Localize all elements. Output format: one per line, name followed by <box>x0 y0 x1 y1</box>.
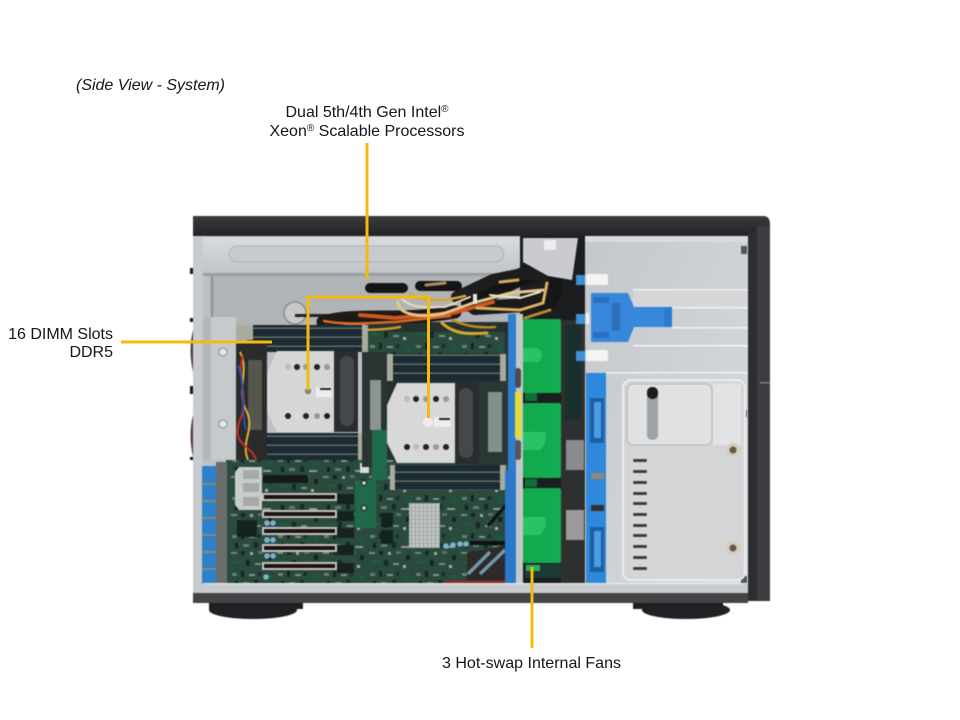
left bracket <box>203 317 236 460</box>
callout label: processors <box>269 104 465 140</box>
callout label: fans: 3 Hot-swap Internal Fans <box>442 655 621 672</box>
white latch tabs <box>576 274 608 361</box>
server chassis photo illustration <box>190 216 770 619</box>
PCH heatsink rear <box>235 467 262 510</box>
callout label: memory: DDR5 <box>69 344 113 361</box>
rear edge fasteners and fan housing <box>190 268 193 460</box>
bottom rail <box>203 583 748 593</box>
heading: side view label: (Side View - System) <box>76 77 225 94</box>
callout label: memory: 16 DIMM Slots <box>8 326 113 343</box>
hot-swap fan 2 <box>523 393 561 478</box>
DIMM bank: lower left <box>247 433 364 460</box>
callout label: processors: Xeon <box>269 123 307 140</box>
fan rail <box>505 314 523 586</box>
hot-swap fan 3 <box>523 479 561 578</box>
hot-swap fan 1 <box>523 319 561 393</box>
callout label: processors: Dual 5th/4th Gen Intel <box>285 104 441 121</box>
fan wires <box>236 325 267 462</box>
motherboard lower <box>226 352 510 583</box>
blue handle <box>591 293 672 342</box>
drive cage panel with vents <box>623 380 745 580</box>
main board behind cables <box>365 322 508 465</box>
callout label: memory <box>8 326 113 361</box>
power cable bundle <box>323 268 556 334</box>
DIMM bank: lower right <box>390 465 506 490</box>
chipset heatsink <box>409 503 440 548</box>
callout label: processors: ® <box>441 104 449 115</box>
DIMM bank: upper right <box>387 354 506 381</box>
PCIe slots <box>262 475 354 573</box>
rear IO blue tabs <box>202 462 227 584</box>
arrow: processors leader <box>308 143 428 418</box>
blue drive rail <box>586 373 606 584</box>
foot: right <box>633 601 730 619</box>
arrow: fans leader <box>530 567 534 648</box>
right side metal panel <box>585 236 748 592</box>
callout label: processors: ® <box>307 123 315 134</box>
CPU 1 heatsink and fan <box>267 351 358 432</box>
callout label: processors: Scalable Processors <box>314 123 465 140</box>
PSU bracket <box>523 238 578 280</box>
top rail <box>203 237 523 326</box>
dark cavity behind fans <box>520 236 586 592</box>
foot: left <box>209 601 303 619</box>
CPU 2 heatsink and fan <box>387 383 479 464</box>
arrow: memory leader <box>121 340 272 344</box>
interior back wall <box>203 236 748 592</box>
chassis frame <box>193 216 770 601</box>
DIMM bank: upper left <box>247 325 368 352</box>
